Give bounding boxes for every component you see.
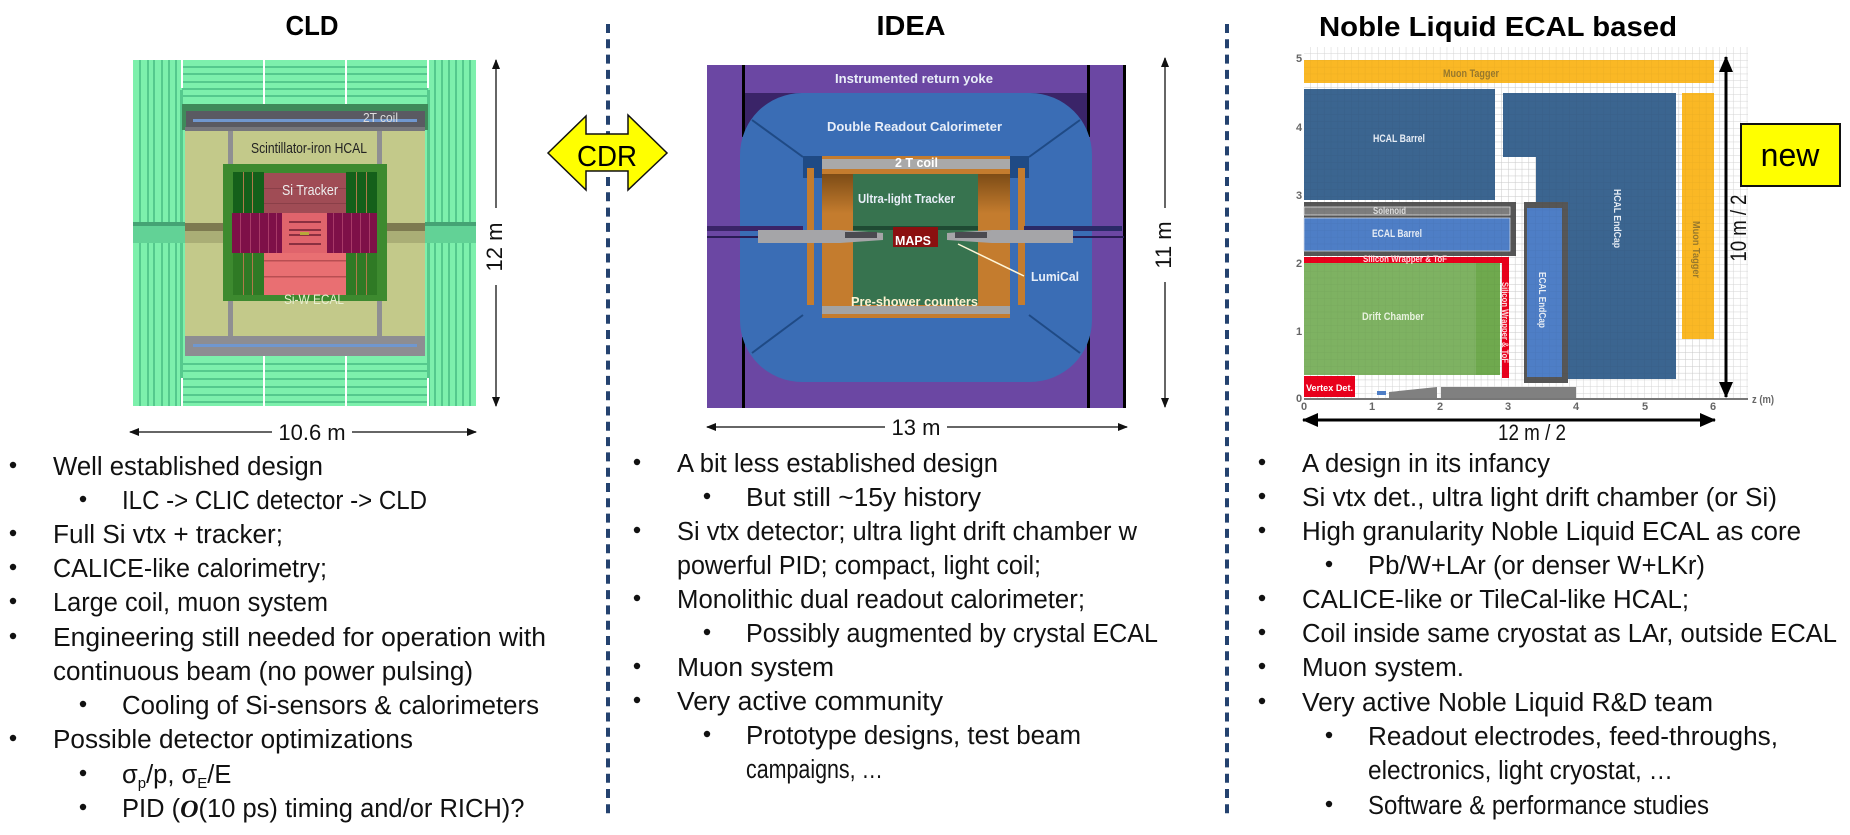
LumiCal pointer <box>958 244 1024 276</box>
axis tick labels: 3 <box>1296 190 1302 202</box>
yoke black lines <box>742 65 745 137</box>
divider: left dashed line <box>606 24 610 815</box>
text block: Noble Liquid bullet list: A design in its infancy <box>1302 450 1550 478</box>
dimension arrow: Noble width 12 m / 2: 12 m / 2 <box>1498 420 1566 445</box>
dimension arrow: Noble height 10 m / 2: 10 m / 2 <box>1726 194 1751 262</box>
callout: new: new <box>1761 137 1820 173</box>
text block: CLD bullet list: Cooling of Si-sensors & calorimeters <box>122 692 539 720</box>
Noble labels: Vertex Det. <box>1306 383 1353 393</box>
beam band through muon columns <box>133 222 185 226</box>
text block: Noble Liquid bullet list: Coil inside same cryostat as LAr, outside ECAL <box>1302 620 1837 648</box>
Noble labels: Muon Tagger <box>1690 221 1701 278</box>
text block: CLD bullet list: /E <box>207 761 231 789</box>
text block: Noble Liquid bullet list: Very active Noble Liquid R&D team <box>1302 689 1713 717</box>
HCAL <box>185 130 425 336</box>
Noble labels <box>1306 68 1701 393</box>
axis tick labels: 5 <box>1642 401 1648 413</box>
dark corners <box>745 93 805 143</box>
text block: IDEA bullet list <box>634 450 1158 784</box>
CLD labels: Si Tracker <box>282 182 338 199</box>
text block: Noble Liquid bullet list: Readout electrodes, feed-throughs, <box>1368 723 1778 751</box>
CLD labels: Scintillator-iron HCAL <box>251 140 367 157</box>
text block: Noble Liquid bullet list: Software & performance studies <box>1368 792 1709 820</box>
text block: CLD bullet list: /p, σ <box>146 761 198 789</box>
panel: Noble Liquid ECAL detector diagram <box>1296 47 1774 413</box>
Noble labels: Muon Tagger <box>1443 68 1500 80</box>
callout: new <box>1741 124 1840 186</box>
text block: IDEA bullet list: Very active community <box>677 688 943 716</box>
text block: CLD bullet list: Possible detector optimizations <box>53 726 413 754</box>
axis tick labels: 2 <box>1437 401 1443 413</box>
panel: IDEA detector diagram <box>707 65 1126 408</box>
axis tick labels: 6 <box>1710 401 1716 413</box>
text block: IDEA bullet list: Monolithic dual readout calorimeter; <box>677 586 1085 614</box>
text block: Noble Liquid bullet list: Muon system. <box>1302 654 1464 682</box>
text block: Noble Liquid bullet list: Pb/W+LAr (or denser W+LKr) <box>1368 552 1705 580</box>
text block: CLD bullet list: σ <box>122 761 138 789</box>
calorimeter <box>740 93 1092 382</box>
axis tick labels: 5 <box>1296 53 1302 65</box>
IDEA labels: Ultra-light Tracker <box>858 191 955 206</box>
axis tick labels: 1 <box>1296 326 1302 338</box>
Noble labels: HCAL Barrel <box>1373 133 1425 145</box>
text block: CLD bullet list: Full Si vtx + tracker; <box>53 521 283 549</box>
text block: IDEA bullet list: Si vtx detector; ultra light drift chamber w <box>677 518 1138 546</box>
coil and inner volume <box>807 168 814 305</box>
panel: CLD detector diagram <box>133 60 476 406</box>
callout: CDR double arrow: CDR <box>577 141 637 173</box>
text block: IDEA bullet list: powerful PID; compact, light coil; <box>677 552 1041 580</box>
text block: IDEA bullet list: Muon system <box>677 654 834 682</box>
text block: CLD bullet list: Well established design <box>53 453 323 481</box>
axis tick labels: 0 <box>1296 393 1302 405</box>
dimension arrow: IDEA width 13 m: 13 m <box>892 415 940 440</box>
text block: IDEA bullet list: campaigns, … <box>746 756 883 784</box>
text block: CLD bullet list <box>10 453 546 823</box>
callout: CDR double arrow <box>548 115 667 190</box>
axis tick labels: 4 <box>1296 122 1303 134</box>
text block: Noble Liquid bullet list: electronics, light cryostat, … <box>1368 757 1673 785</box>
axis tick labels: 3 <box>1505 401 1511 413</box>
Noble labels: HCAL EndCap <box>1611 189 1622 248</box>
text block: Noble Liquid bullet list: High granularity Noble Liquid ECAL as core <box>1302 518 1801 546</box>
dimension arrow: CLD width 10.6 m: 10.6 m <box>278 420 346 445</box>
IDEA labels: Pre-shower counters <box>851 294 978 309</box>
title: CLD: CLD <box>286 10 338 41</box>
axis tick labels: 1 <box>1369 401 1375 413</box>
title: Noble Liquid ECAL based: Noble Liquid ECAL based <box>1319 11 1677 42</box>
CLD labels <box>251 110 398 307</box>
text block: CLD bullet list: ILC -> CLIC detector -> CLD <box>122 487 427 515</box>
Noble labels: Silicon Wrapper & ToF <box>1363 254 1447 264</box>
axis tick labels: z (m) <box>1752 394 1774 406</box>
text block: CLD bullet list: p <box>138 775 146 792</box>
text block: CLD bullet list: Engineering still needed for operation with <box>53 624 546 652</box>
divider: right dashed line <box>1225 24 1229 815</box>
text block: Noble Liquid bullet list: Si vtx det., ultra light drift chamber (or Si) <box>1302 484 1777 512</box>
Noble labels: ECAL Barrel <box>1372 228 1422 240</box>
text block: CLD bullet list: continuous beam (no power pulsing) <box>53 658 473 686</box>
IDEA labels: Double Readout Calorimeter <box>827 119 1002 134</box>
IDEA labels: Instrumented return yoke <box>835 71 993 86</box>
text block: IDEA bullet list: But still ~15y history <box>746 484 981 512</box>
Noble labels: ECAL EndCap <box>1536 272 1547 328</box>
text block: CLD bullet list: CALICE-like calorimetry; <box>53 555 327 583</box>
text block: Noble Liquid bullet list: CALICE-like or TileCal-like HCAL; <box>1302 586 1689 614</box>
text block: IDEA bullet list: Prototype designs, test beam <box>746 722 1081 750</box>
text block: CLD bullet list: Large coil, muon system <box>53 589 328 617</box>
CLD labels: Si-W ECAL <box>284 291 344 307</box>
text block: CLD bullet list: E <box>197 775 207 792</box>
axis tick labels: 2 <box>1296 258 1302 270</box>
axis tick labels <box>1296 53 1774 413</box>
IDEA labels <box>827 71 1079 309</box>
Noble labels: Silicon Wrapper & ToF <box>1500 282 1510 363</box>
text block: IDEA bullet list: A bit less established design <box>677 450 998 478</box>
top coil <box>182 104 428 130</box>
text block: CLD bullet list: PID (O(10 ps) timing and/or RICH)? <box>122 794 524 823</box>
axis tick labels: 4 <box>1573 401 1580 413</box>
inner tracker volume <box>223 164 387 301</box>
dimension arrow: CLD height 12 m: 12 m <box>482 223 507 271</box>
IDEA labels: 2 T coil <box>895 155 938 170</box>
muon system stripes <box>139 60 471 406</box>
IDEA labels: MAPS <box>895 233 931 248</box>
beam line <box>707 226 803 231</box>
text block: Noble Liquid bullet list <box>1259 450 1837 820</box>
axis tick labels: 0 <box>1301 401 1307 413</box>
bottom coil <box>185 336 425 356</box>
dimension arrow: IDEA height 11 m: 11 m <box>1151 221 1176 269</box>
title: IDEA: IDEA <box>876 10 946 41</box>
text block: IDEA bullet list: Possibly augmented by crystal ECAL <box>746 620 1158 648</box>
Noble labels: Drift Chamber <box>1362 311 1425 323</box>
CLD labels: 2T coil <box>363 110 398 125</box>
Noble labels: Solenoid <box>1373 206 1406 217</box>
IDEA labels: LumiCal <box>1031 269 1079 284</box>
